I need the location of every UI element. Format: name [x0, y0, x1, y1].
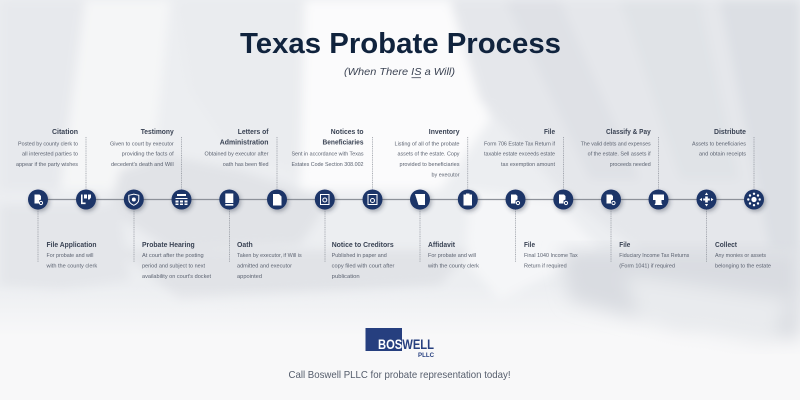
- step: File Application: [28, 190, 98, 270]
- step: File (Form 706): tax exemption amount: [501, 162, 556, 168]
- step: Letters of Administration: [204, 127, 287, 210]
- step: Affidavit: Affidavit: [428, 240, 456, 249]
- step: File (Form 1041): [601, 190, 690, 270]
- step: Notice to Creditors: Notice to Creditors: [332, 240, 394, 249]
- step: Testimony: decedent's death and Will: [111, 162, 174, 168]
- step: Inventory: Listing of all of the probate: [394, 142, 460, 148]
- step: Notices to Beneficiaries: [292, 127, 382, 210]
- step: Probate Hearing: [124, 190, 212, 280]
- step: Probate Hearing: Probate Hearing: [142, 240, 195, 249]
- step: Oath: Taken by executor, if Will is: [237, 253, 302, 259]
- step: Affidavit: with the county clerk: [428, 264, 479, 270]
- step: Testimony: providing the facts of: [122, 152, 174, 158]
- step: Inventory: provided to beneficiaries: [400, 162, 460, 168]
- step: Notices to Beneficiaries: Notices to: [331, 127, 364, 136]
- step: Testimony: Testimony: [141, 127, 174, 136]
- step: Letters of Administration: Obtained by executor after: [204, 152, 269, 158]
- logo: Boswell PLLC: PLLC: [418, 352, 434, 359]
- step: Classify & Pay: [581, 127, 668, 210]
- step: File (Form 1041): Fiduciary Income Tax Returns: [619, 253, 690, 259]
- step: Inventory: Inventory: [429, 127, 460, 136]
- step: Citation: Citation: [52, 127, 78, 136]
- step: Testimony: Given to court by executor: [110, 142, 174, 148]
- step: Distribute: and obtain receipts: [699, 152, 746, 158]
- step: Collect: belonging to the estate: [715, 264, 771, 270]
- step: Classify & Pay: The valid debts and expenses: [581, 142, 651, 148]
- step: Notice to Creditors: [315, 190, 395, 280]
- step: Inventory: [394, 127, 478, 210]
- step: Distribute: Assets to beneficiaries: [692, 142, 746, 148]
- logo: Boswell PLLC: BOSWELL: [378, 336, 434, 352]
- timeline line: [38, 198, 754, 200]
- step: Letters of Administration: Administration: [220, 138, 268, 146]
- step: File (Form 1041): (Form 1041) if required: [619, 264, 675, 270]
- title: Texas Probate Process: [240, 28, 561, 60]
- step: File Application: with the county clerk: [46, 264, 98, 270]
- step: Notice to Creditors: copy filed with court after: [332, 264, 395, 270]
- step: Inventory: assets of the estate. Copy: [398, 152, 460, 158]
- step: Notice to Creditors: publication: [332, 274, 360, 280]
- step: Probate Hearing: period and subject to next: [142, 264, 206, 270]
- logo: Boswell PLLC: [366, 328, 434, 359]
- step: Citation: appear if the party wishes: [16, 162, 78, 168]
- step: File (Form 1040): Final 1040 Income Tax: [524, 253, 578, 259]
- step: Notices to Beneficiaries: Sent in accordance with Texas: [292, 152, 364, 158]
- step: File (Form 1041): File: [619, 240, 630, 249]
- step: Testimony: [110, 127, 192, 210]
- step: Notices to Beneficiaries: Estates Code Section 308.002: [292, 162, 364, 168]
- step: Collect: Any monies or assets: [715, 253, 766, 259]
- step: Classify & Pay: Classify & Pay: [606, 127, 651, 136]
- step: Classify & Pay: of the estate. Sell assets if: [588, 152, 651, 158]
- step: Oath: Oath: [237, 240, 253, 249]
- step: File (Form 706): [484, 127, 573, 210]
- step: Collect: Collect: [715, 240, 738, 249]
- call to action: Call Boswell PLLC for probate representation today!: [288, 369, 510, 381]
- step: Probate Hearing: At court after the posting: [142, 253, 204, 259]
- step: File (Form 1040): [506, 190, 578, 270]
- step: Notices to Beneficiaries: Beneficiaries: [322, 138, 364, 146]
- subtitle: (When There IS a Will): [344, 66, 455, 78]
- step: Distribute: Distribute: [714, 127, 746, 136]
- step: Letters of Administration: oath has been filed: [223, 162, 269, 168]
- step: File (Form 1040): File: [524, 240, 535, 249]
- step: Oath: [219, 190, 302, 280]
- step: Notice to Creditors: Published in paper and: [332, 253, 387, 259]
- step: File Application: File Application: [46, 240, 96, 249]
- step: Letters of Administration: Letters of: [238, 127, 269, 136]
- step: File (Form 706): File: [544, 127, 555, 136]
- step: File Application: For probate and will: [46, 253, 94, 259]
- step: Citation: all interested parties to: [22, 152, 78, 158]
- step: Affidavit: For probate and will: [428, 253, 476, 259]
- step: File (Form 1040): Return if required: [524, 264, 567, 270]
- step: Oath: admitted and executor: [237, 264, 292, 270]
- step: Affidavit: [410, 190, 479, 270]
- step: Citation: [16, 127, 96, 210]
- step: Oath: appointed: [237, 274, 262, 280]
- step: File (Form 706): Form 706 Estate Tax Return if: [484, 142, 556, 148]
- step: File (Form 706): taxable estate exceeds estate: [484, 152, 555, 158]
- step: Citation: Posted by county clerk to: [18, 142, 78, 148]
- step: Distribute: [692, 127, 764, 210]
- step: Inventory: by executor: [432, 172, 460, 178]
- step: Probate Hearing: availability on court's docket: [142, 274, 212, 280]
- step: Classify & Pay: proceeds needed: [610, 162, 651, 168]
- step: Collect: [696, 190, 771, 270]
